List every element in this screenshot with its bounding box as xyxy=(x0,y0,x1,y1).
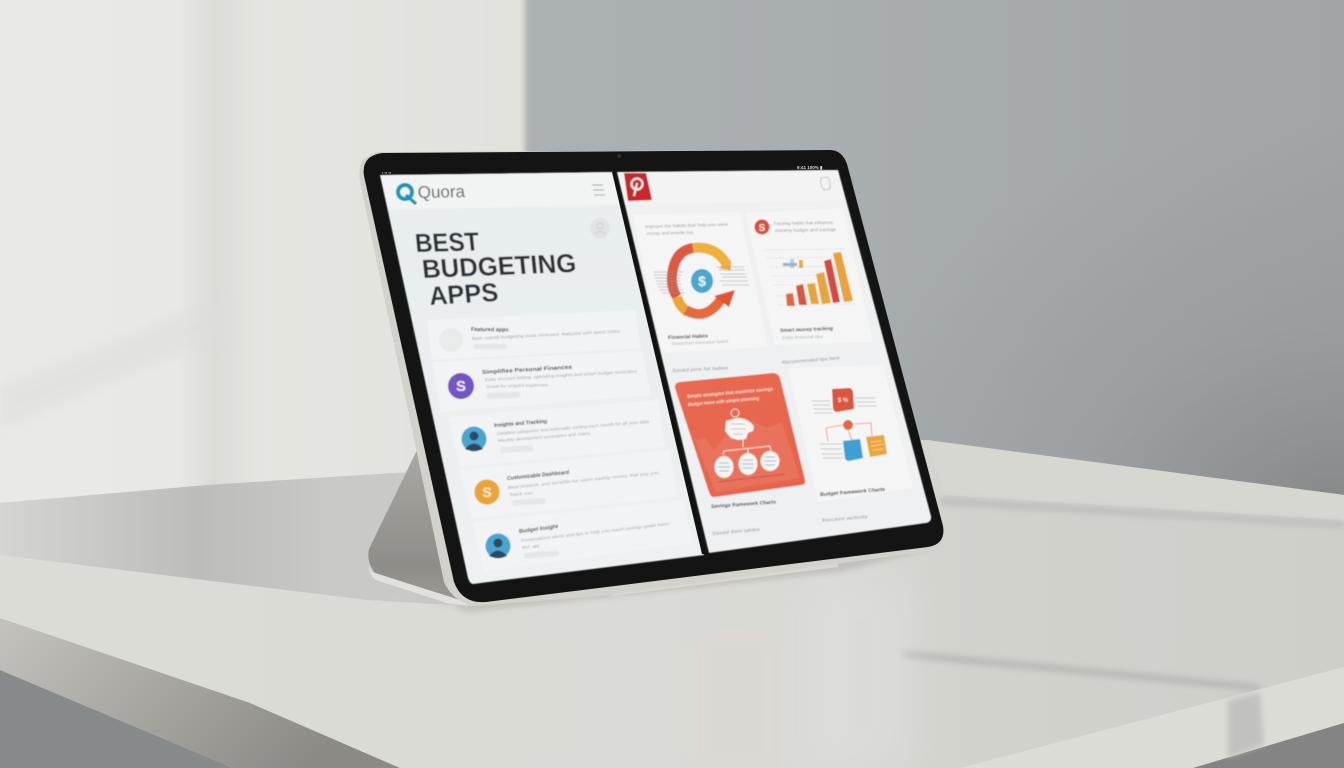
black bezel xyxy=(364,150,943,602)
savings circles xyxy=(714,451,780,478)
app card 3: Monthly development summaries and charts xyxy=(498,431,590,443)
share icon xyxy=(820,177,830,190)
app card 2 xyxy=(432,351,651,412)
app card 3: Insights and Tracking xyxy=(494,419,547,429)
card: red piggy bank infographic: Budget more with simple planning xyxy=(688,396,759,407)
table top xyxy=(0,440,1344,768)
app card 3 xyxy=(448,400,665,467)
status bar xyxy=(382,165,823,175)
heading xyxy=(414,226,578,311)
caption: flowchart: Budget framework Charts xyxy=(820,487,885,498)
dollar coin xyxy=(691,269,713,293)
card: bar chart: monthly budget and savings xyxy=(775,227,836,233)
app card 1: Best overall budgeting tools reviewed, featured with latest notes xyxy=(472,329,620,341)
card: flowchart xyxy=(788,365,913,502)
table front edge xyxy=(0,618,1344,768)
bars xyxy=(786,252,853,306)
app card 2: S xyxy=(456,378,466,395)
heading: BEST xyxy=(414,226,481,258)
app card 5: Personalized alerts and tips to help you reach savings goals faster xyxy=(521,521,671,543)
section labels: Saved their tables xyxy=(712,527,761,536)
left screen: Quora xyxy=(380,172,704,584)
piggy bank xyxy=(725,409,754,440)
card: red piggy bank infographic: Simple strategies that maximize savings xyxy=(687,386,773,399)
status bar: ▪ ▪▪ ▪▪ xyxy=(382,170,392,175)
dollar coin: $ xyxy=(698,273,706,289)
section labels: Recent activity xyxy=(822,514,869,523)
chart small text lines xyxy=(654,267,749,293)
card: cycle chart: Financial Habits xyxy=(668,333,708,341)
Quora logo: Quora xyxy=(417,182,466,202)
section labels: Recommended tips here xyxy=(782,355,841,365)
status bar: 9:41 100% ▮ xyxy=(797,165,823,170)
card: cycle chart: money and smarter too xyxy=(647,230,694,236)
split divider xyxy=(612,172,706,554)
heading: BUDGETING xyxy=(421,248,578,284)
app card 5: Budget Insight xyxy=(519,524,558,535)
app card 4: back too xyxy=(510,490,534,497)
Pinterest header bar xyxy=(617,170,845,205)
menu icon xyxy=(592,185,605,195)
Pinterest logo xyxy=(624,173,652,201)
profile icon xyxy=(590,218,610,238)
card: bar chart: S xyxy=(759,223,766,234)
silver frame xyxy=(359,150,943,606)
tree lines xyxy=(723,439,771,456)
app card 4: Customizable Dashboard xyxy=(507,470,569,482)
bar chart legend xyxy=(783,259,803,268)
caption: piggy bank: Savings framework Charts xyxy=(711,499,776,510)
camera xyxy=(617,154,621,158)
app card 3: Detailed categories and automatic sorting each month for all your data xyxy=(497,419,650,436)
right screen: Pinterest xyxy=(617,170,931,553)
card: cycle chart: Saved from inspiration board xyxy=(671,339,728,346)
Quora logo xyxy=(398,182,466,203)
app card 2: Simplifies Personal Finances xyxy=(482,365,572,376)
card: flowchart: $ % xyxy=(838,398,849,404)
card: cycle chart xyxy=(633,212,768,353)
card: bar chart xyxy=(745,208,873,345)
card: red piggy bank infographic xyxy=(675,373,805,497)
card: bar chart: Smart money tracking xyxy=(780,326,833,334)
app card 4: S xyxy=(482,484,492,500)
folding stand xyxy=(368,450,838,606)
section labels: Saved pins for ladies xyxy=(672,365,729,373)
tablet body xyxy=(359,150,943,606)
app card 4: Best rewards and benefits for users saving money that pay you xyxy=(508,470,660,490)
heading: APPS xyxy=(428,277,500,311)
donut cycle xyxy=(672,248,727,314)
app card 2: Great for shared expenses xyxy=(486,382,548,389)
app card 2: Easy account linking, spending insights and smart budget reminders xyxy=(485,369,637,382)
mountains xyxy=(695,421,800,492)
app card 1 xyxy=(427,310,641,360)
bar chart grid xyxy=(765,249,855,305)
app card 5 xyxy=(473,500,693,572)
Quora header bar xyxy=(380,172,621,210)
card: bar chart: Tracking habits that influence xyxy=(773,220,834,226)
app card 5: for all xyxy=(522,543,539,550)
card: cycle chart: Improve the habits that help you save xyxy=(645,221,729,229)
tablet shadow xyxy=(368,545,945,612)
section labels xyxy=(672,355,869,536)
app card 4 xyxy=(460,450,677,518)
app card 1: Featured apps xyxy=(471,327,509,333)
card: bar chart: Daily financial tips xyxy=(782,334,823,340)
